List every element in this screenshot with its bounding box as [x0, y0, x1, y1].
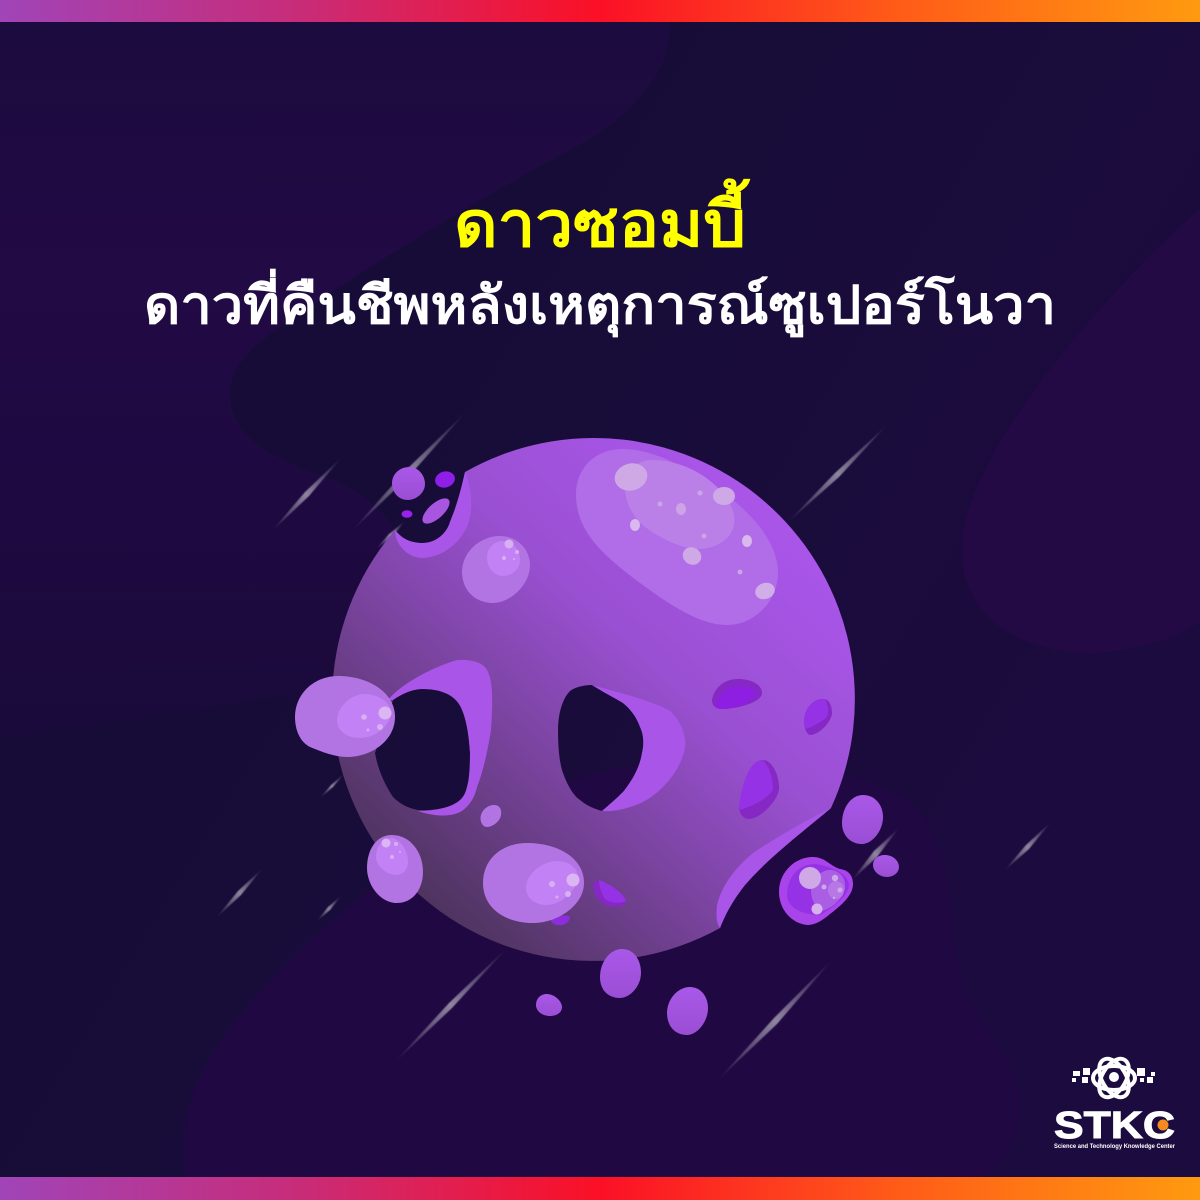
- rocks: bottom debris: [536, 949, 708, 1035]
- planet: [332, 438, 855, 961]
- rocks: right debris: [842, 795, 899, 877]
- highlights on surface patch: [612, 460, 777, 602]
- inner surface patch: [625, 460, 734, 549]
- rock: bottom centre pale blob: [483, 843, 584, 923]
- logo wordmark: STKC: [1054, 1105, 1175, 1147]
- background blob: right: [962, 208, 1200, 653]
- title: [144, 178, 1056, 338]
- title line 2: ดาวที่คืนชีพหลังเหตุการณ์ซูเปอร์โนวา: [144, 269, 1056, 338]
- crater: upper pale blob: [462, 536, 530, 603]
- small pale spot: [480, 805, 501, 827]
- crater rim: bottom right bite: [716, 808, 831, 928]
- rock: left lower pale blob: [367, 835, 423, 903]
- rock: glossy purple blob: [779, 857, 853, 925]
- logo: STKC: [1054, 1054, 1176, 1150]
- background blob: bottom: [183, 760, 1020, 1177]
- rim: right hole: [592, 685, 685, 811]
- crater rim: top left bite: [395, 472, 471, 558]
- rim: left hole: [388, 660, 492, 816]
- logo tagline: Science and Technology Knowledge Center: [1054, 1144, 1176, 1150]
- logo atom icon: [1072, 1054, 1155, 1102]
- dark crater: under blob: [550, 916, 570, 925]
- logo orange dot: [1158, 1120, 1168, 1130]
- dark crater: right small: [804, 699, 832, 735]
- planet body with bites and holes: [332, 438, 855, 961]
- top gradient bar: [0, 0, 1200, 22]
- background blob: top left: [0, 22, 670, 738]
- dark crater: right lower: [739, 760, 779, 819]
- bottom gradient bar: [0, 1177, 1200, 1200]
- title line 1: ดาวซอมบี้: [454, 178, 751, 260]
- dark crater: bottom: [593, 880, 626, 907]
- falling streaks: [216, 411, 1051, 1081]
- large surface patch: [576, 449, 778, 625]
- rock: left large pale blob: [295, 676, 395, 757]
- rocks: top left debris: [392, 467, 457, 528]
- dark crater: right upper: [712, 679, 762, 709]
